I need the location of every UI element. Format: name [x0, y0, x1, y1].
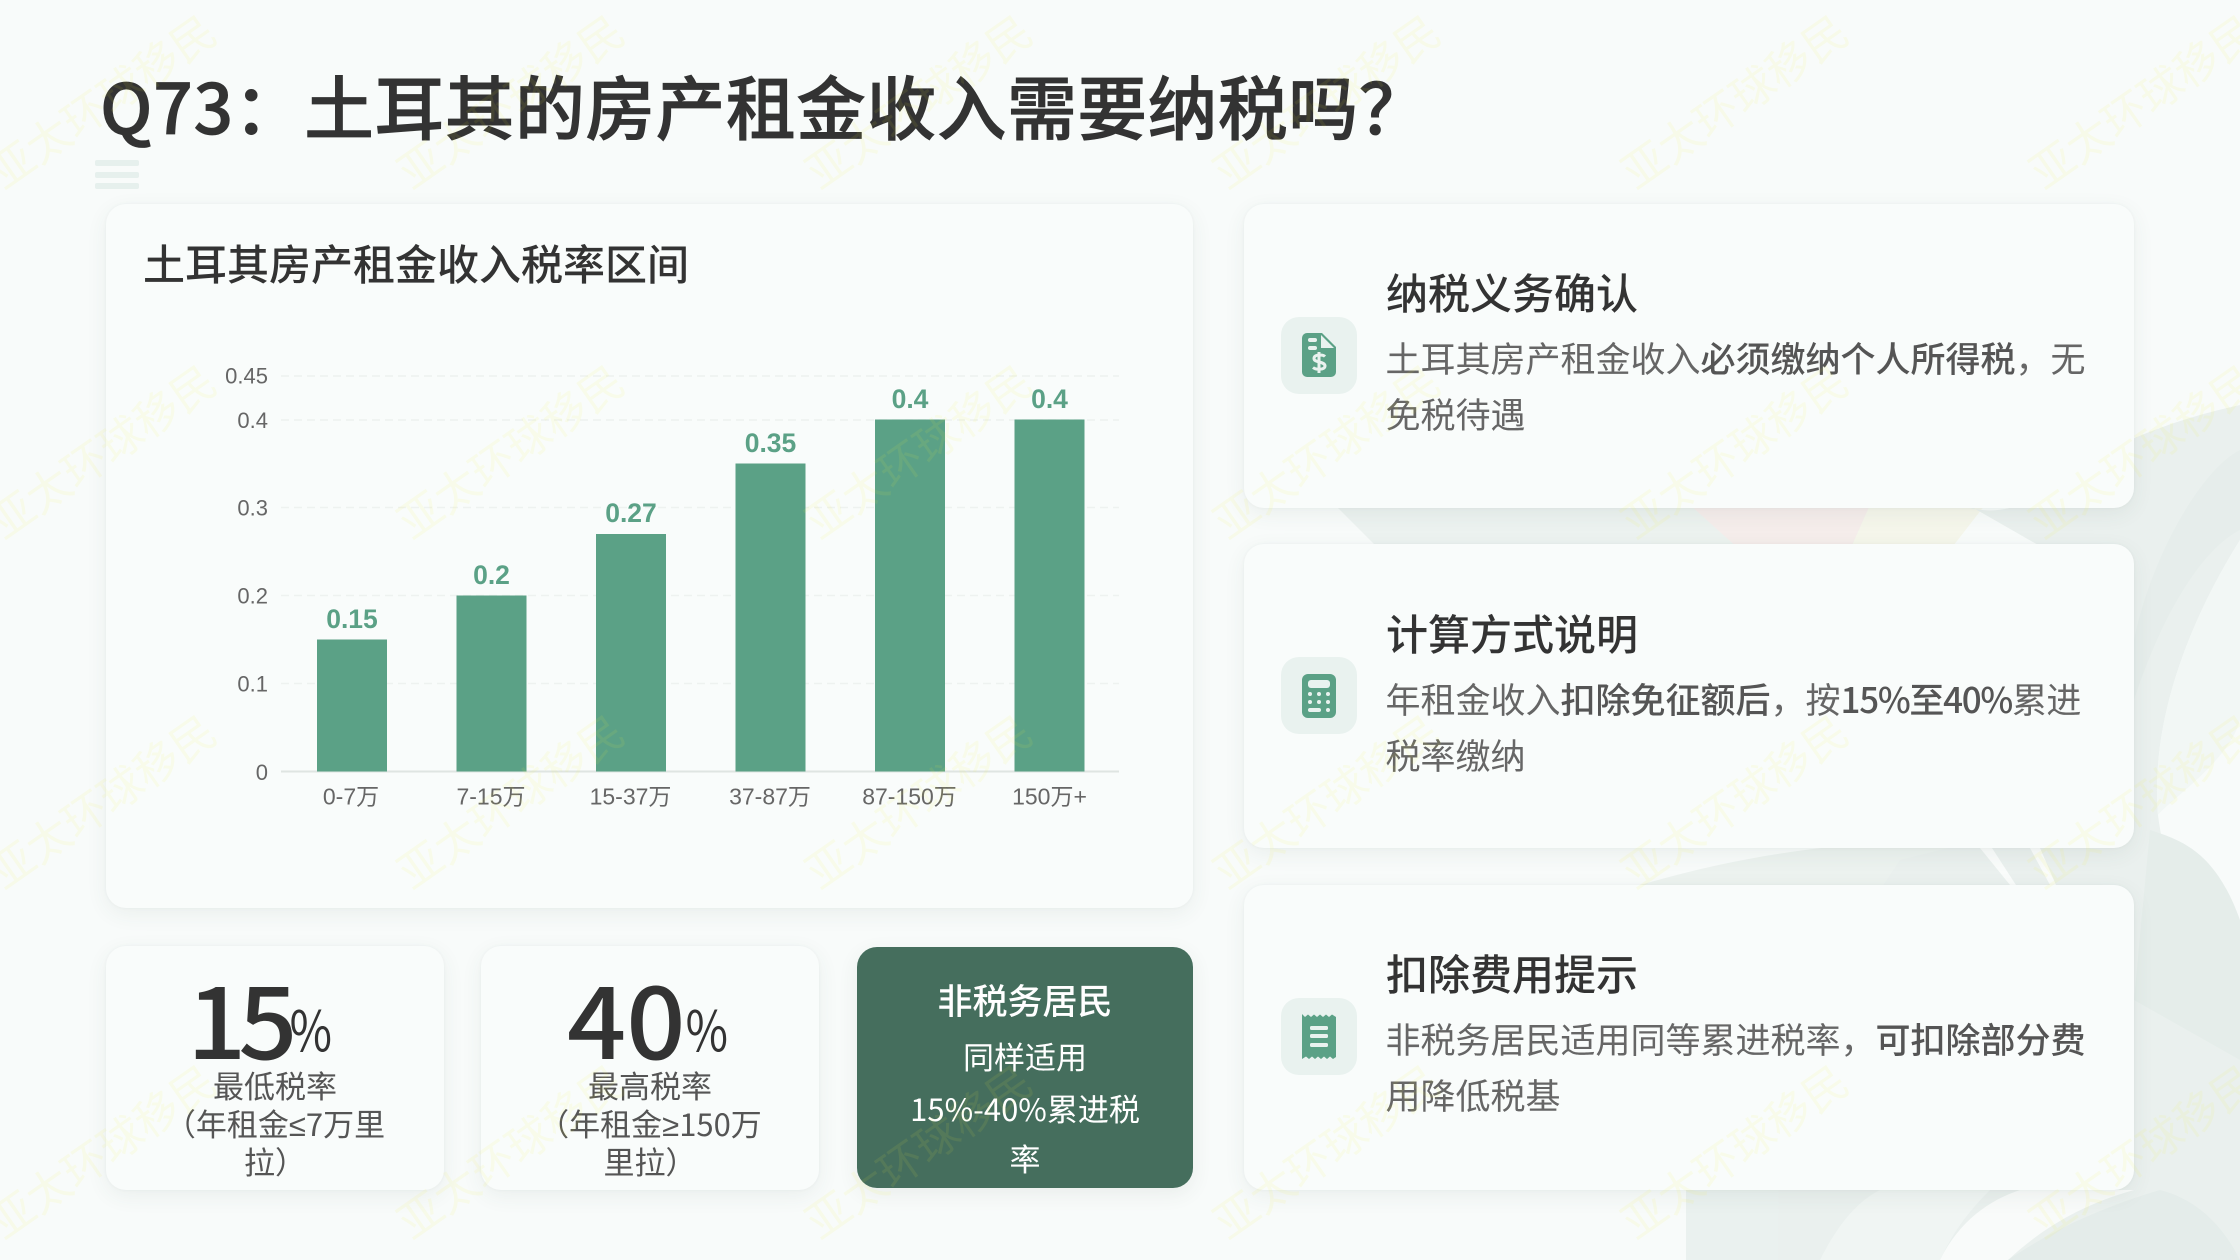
y axis labels: 0.2 — [237, 584, 268, 608]
panel: deduction hint — [1244, 885, 2134, 1190]
watermark overlay: 亚太环球移民 — [1198, 0, 1451, 201]
callout text — [910, 1033, 1140, 1180]
text: calculation method: 年租金收入扣除免征额后，按15%至40%累进 — [1386, 673, 2081, 724]
callout text: 率 — [1010, 1135, 1040, 1180]
stat label: 拉） — [244, 1138, 306, 1183]
text: tax obligation: 免税待遇 — [1386, 388, 1526, 439]
panel: calculation method — [1244, 544, 2134, 848]
watermark overlay: 亚太环球移民 — [1606, 0, 1859, 201]
watermark overlay: 亚太环球移民 — [382, 347, 635, 551]
category labels: 15-37万 — [590, 784, 671, 810]
y axis labels: 0.3 — [237, 496, 268, 520]
watermark overlay: 亚太环球移民 — [1198, 347, 1451, 551]
stat label — [538, 1062, 762, 1183]
heading: tax obligation: 纳税义务确认 — [1386, 261, 1638, 322]
panel: tax obligation — [1244, 204, 2134, 508]
stat number 15%: 15 — [187, 945, 290, 1087]
callout text: 同样适用 — [963, 1033, 1087, 1078]
category labels: 87-150万 — [862, 784, 957, 810]
category labels: 37-87万 — [729, 784, 811, 810]
bars — [317, 420, 1084, 772]
callout text: 15%-40%累进税 — [910, 1085, 1140, 1130]
watermark overlay: 亚太环球移民 — [1198, 1047, 1451, 1251]
watermark overlay: 亚太环球移民 — [790, 1047, 1043, 1251]
bar value labels: 0.27 — [605, 498, 657, 528]
heading: calculation method: 计算方式说明 — [1386, 602, 1638, 663]
text: deduction hint: 非税务居民适用同等累进税率，可扣除部分费 — [1386, 1013, 2086, 1064]
heading: chart title: 土耳其房产租金收入税率区间 — [143, 232, 689, 293]
y axis labels: 0 — [256, 760, 268, 785]
watermark overlay: 亚太环球移民 — [382, 697, 635, 901]
watermark overlay: 亚太环球移民 — [790, 0, 1043, 201]
watermark overlay: 亚太环球移民 — [1606, 697, 1859, 901]
watermark overlay: 亚太环球移民 — [790, 697, 1043, 901]
bar value labels: 0.2 — [473, 560, 510, 590]
text: tax obligation — [1386, 332, 2086, 439]
icon: receipt — [1281, 998, 1357, 1075]
bar value labels — [326, 384, 1068, 634]
text: tax obligation: 土耳其房产租金收入必须缴纳个人所得税，无 — [1386, 332, 2086, 383]
text: calculation method — [1386, 673, 2081, 780]
y axis labels — [225, 364, 268, 785]
text: deduction hint — [1386, 1013, 2086, 1120]
y axis labels: 0.1 — [237, 672, 268, 696]
stat label — [165, 1062, 385, 1183]
heading: deduction hint: 扣除费用提示 — [1386, 942, 1638, 1003]
stat label: （年租金≥150万 — [538, 1100, 762, 1145]
stat label: 最高税率 — [588, 1062, 712, 1107]
stat number 40%: 40 — [567, 945, 686, 1087]
panel: tax rate bar chart — [106, 204, 1193, 908]
bar value labels: 0.15 — [326, 604, 378, 634]
icon: title menu bars — [95, 160, 139, 189]
stat number 40%: % — [686, 988, 728, 1069]
title: Q73：土耳其的房产租金收入需要纳税吗？ — [100, 54, 1429, 155]
category labels: 7-15万 — [456, 784, 526, 810]
text: deduction hint: 用降低税基 — [1386, 1069, 1561, 1120]
callout heading: 非税务居民 — [937, 974, 1112, 1025]
icon: tax document — [1281, 317, 1357, 394]
stat label: （年租金≤7万里 — [165, 1100, 385, 1145]
text: calculation method: 税率缴纳 — [1386, 729, 1526, 780]
icon: calculator — [1281, 657, 1357, 734]
panel: lowest rate stat — [106, 946, 444, 1190]
stat label: 最低税率 — [213, 1062, 337, 1107]
watermark overlay: 亚太环球移民 — [790, 347, 1043, 551]
bar chart — [225, 364, 1119, 810]
watermark overlay: 亚太环球移民 — [382, 1047, 635, 1251]
panel: non-tax resident callout — [857, 947, 1193, 1188]
watermark overlay: 亚太环球移民 — [382, 0, 635, 201]
stat label: 里拉） — [604, 1138, 696, 1183]
y axis labels: 0.4 — [237, 408, 268, 433]
category labels: 150万+ — [1012, 784, 1087, 810]
panel: highest rate stat — [481, 946, 819, 1190]
category labels — [323, 784, 1087, 810]
watermark overlay: 亚太环球移民 — [1606, 347, 1859, 551]
watermark overlay: 亚太环球移民 — [1198, 697, 1451, 901]
category labels: 0-7万 — [323, 784, 379, 810]
bar value labels: 0.4 — [1031, 384, 1068, 414]
bar value labels: 0.4 — [892, 384, 929, 414]
watermark overlay: 亚太环球移民 — [1606, 1047, 1859, 1251]
bar value labels: 0.35 — [745, 428, 796, 458]
y axis labels: 0.45 — [225, 364, 268, 388]
stat number 15%: % — [290, 988, 332, 1069]
